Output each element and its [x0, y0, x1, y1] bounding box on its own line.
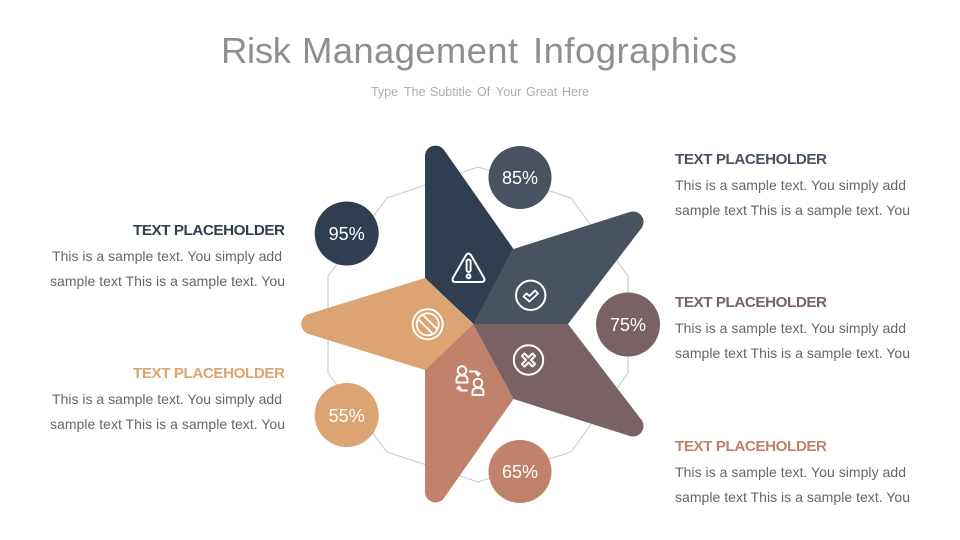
text block: top right [675, 151, 910, 218]
subtitle: Subtitle [430, 85, 472, 99]
petal: slate [473, 211, 644, 324]
text block: middle right: TEXT PLACEHOLDER [675, 294, 827, 311]
badge: 75% [596, 292, 660, 356]
subtitle: Type [371, 85, 398, 99]
icon: prohibited sign [413, 309, 443, 339]
badge: 65%: 65% [502, 462, 538, 482]
petal: sand [301, 278, 473, 370]
petal: terracotta [425, 324, 514, 502]
text block: top right: This is a sample text. You simply add [675, 177, 906, 193]
decagon outline [328, 167, 628, 482]
text block: bottom left [50, 365, 285, 432]
title [221, 30, 737, 71]
badge: 95%: 95% [329, 224, 365, 244]
badge: 85% [488, 146, 552, 209]
text block: top right: sample text This is a sample text. You [675, 202, 910, 218]
subtitle: The [404, 85, 426, 99]
badge: 75%: 75% [610, 315, 646, 335]
text block: bottom left: sample text This is a sample text. You [50, 416, 285, 432]
subtitle: Here [562, 85, 589, 99]
text block: top right: TEXT PLACEHOLDER [675, 151, 827, 168]
title: Infographics [533, 30, 737, 71]
text block: middle right: sample text This is a sample text. You [675, 345, 910, 361]
title: Management [302, 30, 518, 71]
badge: 55%: 55% [329, 406, 365, 426]
subtitle: Your [496, 85, 521, 99]
icon: cross circle [514, 345, 543, 375]
text block: bottom left: TEXT PLACEHOLDER [133, 365, 285, 382]
text block: bottom right: This is a sample text. You simply add [675, 464, 906, 480]
badge: 55% [315, 383, 379, 447]
badge: 85%: 85% [502, 168, 538, 188]
text block: top left [50, 222, 285, 289]
icon: people exchange [456, 366, 484, 395]
subtitle: Great [526, 85, 558, 99]
text block: bottom right: sample text This is a sample text. You [675, 489, 910, 505]
text block: top left: sample text This is a sample text. You [50, 273, 285, 289]
text block: bottom right [675, 438, 910, 505]
text block: middle right: This is a sample text. You simply add [675, 320, 906, 336]
icon: check circle [516, 281, 545, 310]
text block: bottom right: TEXT PLACEHOLDER [675, 438, 827, 455]
text block: top left: TEXT PLACEHOLDER [133, 222, 285, 239]
petal: navy [425, 146, 514, 324]
badge: 65% [488, 440, 552, 503]
badge: 95% [315, 202, 379, 266]
text block: middle right [675, 294, 910, 361]
text block: bottom left: This is a sample text. You simply add [52, 391, 282, 407]
title: Risk [221, 30, 292, 71]
subtitle: Of [477, 85, 491, 99]
icon: warning triangle [453, 254, 484, 282]
petal: mauve [473, 324, 644, 437]
text block: top left: This is a sample text. You simply add [52, 248, 282, 264]
